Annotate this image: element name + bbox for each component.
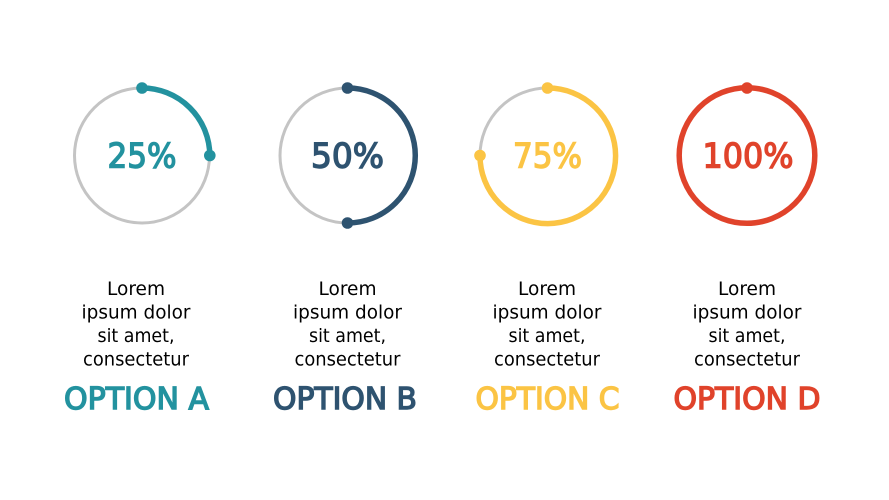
percentage: 100%	[702, 136, 794, 176]
description: sit amet,	[508, 326, 586, 347]
description: consectetur	[83, 349, 189, 370]
description: ipsum dolor	[492, 302, 602, 324]
percentage: 50%	[311, 136, 384, 176]
description	[492, 279, 602, 370]
description	[82, 279, 191, 370]
option label: OPTION C	[476, 382, 620, 417]
progress ring: 75%	[474, 82, 616, 224]
option label: OPTION A	[64, 382, 209, 417]
option label: OPTION D	[674, 382, 820, 417]
description: consectetur	[294, 349, 401, 370]
description: sit amet,	[98, 326, 174, 347]
panel: option D	[674, 82, 820, 417]
panel: option C	[474, 82, 620, 417]
percentage: 25%	[108, 136, 176, 176]
description: consectetur	[694, 349, 800, 370]
progress ring: 25%	[74, 82, 216, 223]
description: consectetur	[494, 349, 600, 370]
description: sit amet,	[708, 326, 786, 347]
description: ipsum dolor	[293, 302, 402, 324]
option label: OPTION B	[273, 382, 417, 417]
description: sit amet,	[309, 326, 386, 347]
progress ring: 100%	[679, 82, 815, 223]
description: ipsum dolor	[692, 302, 802, 324]
description	[692, 279, 802, 370]
percentage: 75%	[513, 136, 582, 176]
description: Lorem	[518, 279, 576, 300]
description: Lorem	[718, 279, 776, 300]
description: Lorem	[107, 279, 165, 300]
description	[293, 279, 402, 370]
panel: option B	[273, 82, 417, 417]
panel: option A	[64, 82, 216, 417]
progress ring: 50%	[280, 82, 415, 229]
description: Lorem	[318, 279, 376, 300]
description: ipsum dolor	[82, 302, 191, 324]
